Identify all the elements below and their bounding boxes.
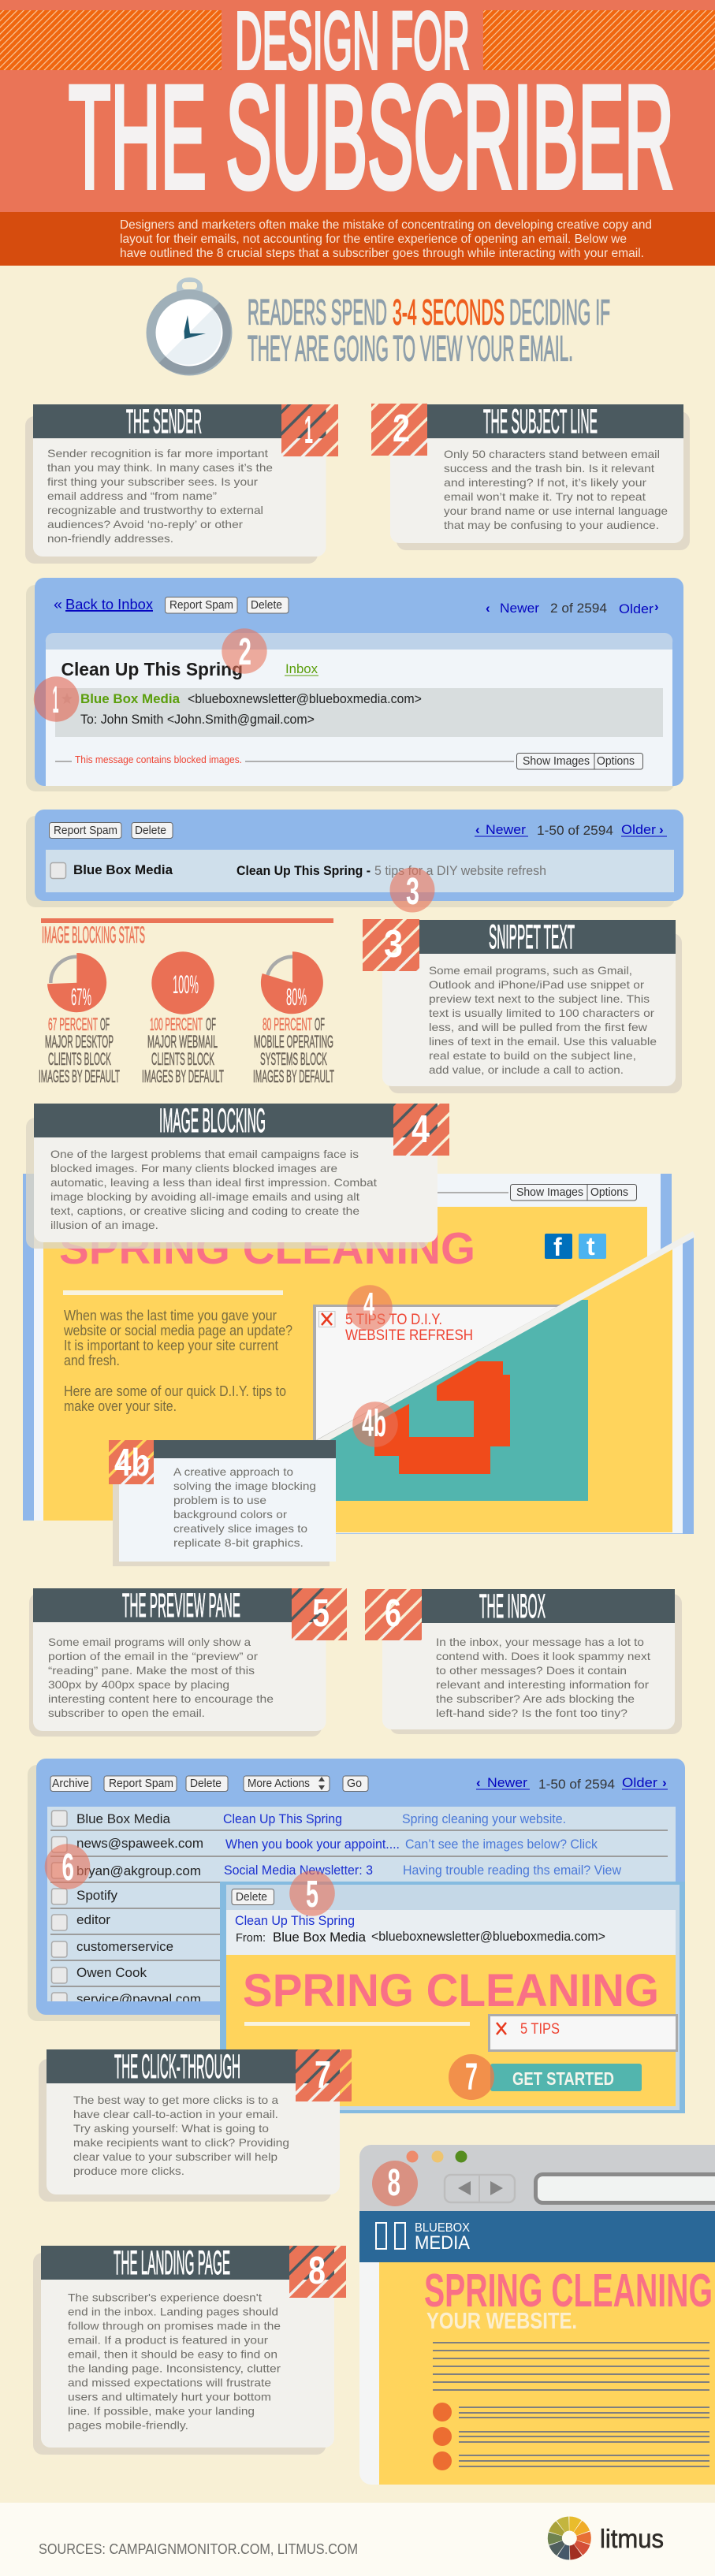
body text: clear value to your subscriber will help — [73, 2151, 277, 2163]
toolbar: Report Spam — [109, 1778, 173, 1790]
heading: readers spend 3-4 seconds: READERS SPEND — [248, 292, 387, 333]
panel: the sender — [25, 403, 338, 564]
button get started — [490, 2064, 642, 2091]
panel: the click-through — [39, 2048, 352, 2202]
text: MOBILE OPERATING — [254, 1032, 333, 1052]
message list: customerservice — [76, 1939, 173, 1954]
marker 1 — [34, 676, 79, 722]
badge 4b: 4b — [114, 1442, 150, 1484]
toolbar: Older — [619, 601, 654, 616]
caption 67 percent — [39, 1014, 120, 1086]
message list — [47, 1807, 676, 2008]
litmus logo wheel — [549, 2518, 590, 2559]
panel: blocked email mockup: Show Images — [516, 1186, 583, 1199]
pie chart 80 percent — [261, 951, 323, 1014]
message list: editor — [76, 1912, 110, 1927]
icon: twitter: t — [587, 1232, 595, 1260]
intro text block — [0, 212, 715, 266]
body text — [429, 965, 657, 1076]
marker 3: 3 — [406, 871, 419, 913]
body text: follow through on promises made in the — [68, 2321, 281, 2332]
panel: the preview pane — [29, 1587, 347, 1737]
body text: “reading” pane. Make the most of this — [48, 1665, 255, 1677]
body text: left-hand side? Is the font too tiny? — [436, 1707, 627, 1719]
header banner — [0, 0, 715, 219]
message list: Blue Box Media — [76, 1811, 171, 1826]
address bar — [536, 2174, 715, 2202]
body text — [436, 1636, 650, 1719]
message list: Can’t see the images below? Click — [405, 1837, 598, 1852]
message list: news@spaweek.com — [76, 1836, 203, 1851]
panel: preview pane mockup: From: — [236, 1931, 266, 1945]
panel: image blocking 4b callout — [109, 1440, 336, 1566]
body text: produce more clicks. — [73, 2165, 184, 2177]
body text: replicate 8-bit graphics. — [173, 1537, 304, 1549]
badge 2: 2 — [393, 408, 410, 450]
body text: One of the largest problems that email campaigns face is — [50, 1148, 359, 1160]
toolbar: Newer — [487, 1775, 527, 1790]
panel: opened email mockup: Options — [597, 755, 635, 768]
body text: less, and will be pulled from the first few — [429, 1022, 647, 1033]
panel: opened email mockup: To: John Smith <John.Smith@gmail.com> — [80, 712, 315, 727]
marker 6: 6 — [61, 1847, 74, 1889]
badge 1 — [281, 404, 338, 456]
marker 4 — [347, 1285, 393, 1331]
blocked image placeholder — [313, 1305, 561, 1440]
caption 67 percent: 67 PERCENT — [48, 1014, 98, 1034]
toolbar: « — [54, 596, 62, 612]
toolbar: Go — [347, 1778, 362, 1790]
body text: to other messages? Does it contain — [436, 1665, 627, 1677]
toolbar: Older — [622, 1775, 657, 1790]
browser nav buttons — [445, 2175, 515, 2202]
panel: inbox row mockup: 5 tips for a DIY website refresh — [374, 863, 546, 878]
marker 8 — [372, 2161, 418, 2206]
panel: the subject line — [371, 403, 690, 550]
panel: opened email mockup: Blue Box Media — [80, 691, 181, 706]
body text: portion of the email in the “preview” or — [48, 1651, 258, 1662]
badge 8: 8 — [308, 2250, 326, 2292]
panel: preview pane mockup: Clean Up This Spring — [235, 1913, 355, 1928]
icon: twitter — [579, 1232, 606, 1260]
body text — [50, 1148, 377, 1231]
intro text block: Designers and marketers often make the mistake of concentrating on developing creative copy and — [120, 218, 652, 232]
icon: stopwatch — [147, 277, 232, 375]
email copy: website or social media page an update? — [63, 1322, 292, 1338]
body text: Sender recognition is far more important — [47, 448, 268, 460]
pie chart 80 percent: 80% — [286, 983, 307, 1011]
panel: inbox row mockup: Delete — [135, 825, 166, 837]
panel: opened email mockup: This message contains blocked images. — [75, 754, 242, 765]
marker 4b: 4b — [362, 1403, 386, 1445]
panel: inbox row mockup: Report Spam — [54, 825, 117, 837]
body text: automatic, leaving a less than ideal first impression. Combat — [50, 1177, 377, 1189]
body text: email won’t make it. Try not to repeat — [444, 491, 646, 503]
body text: add value, or include a call to action. — [429, 1064, 624, 1076]
blocked image 5 tips — [489, 2015, 676, 2051]
panel: inbox row mockup: › — [659, 822, 664, 837]
caption 80 percent: SYSTEMS BLOCK — [260, 1049, 327, 1069]
panel: opened email mockup: Clean Up This Spring — [61, 659, 243, 679]
text: IMAGES BY DEFAULT — [253, 1067, 334, 1086]
body text: email address and “from name” — [47, 490, 217, 502]
panel: preview pane mockup: <blueboxnewsletter@blueboxmedia.com> — [371, 1929, 605, 1944]
badge 5: 5 — [312, 1592, 330, 1635]
body text: end in the inbox. Landing pages should — [68, 2306, 278, 2317]
panel: blocked email mockup: Options — [590, 1186, 628, 1199]
panel: preview pane mockup: Delete — [236, 1891, 267, 1904]
toolbar: › — [662, 1775, 667, 1790]
toolbar — [50, 1775, 668, 1792]
body text: have clear call-to-action in your email. — [73, 2109, 278, 2120]
panel: the preview pane: THE PREVIEW PANE — [122, 1587, 240, 1625]
message list: Clean Up This Spring — [223, 1811, 342, 1826]
panel: inbox row mockup: Newer — [486, 822, 526, 837]
body text: solving the image blocking — [173, 1480, 316, 1492]
body text — [68, 2292, 281, 2431]
marker 2: 2 — [238, 631, 251, 673]
panel: the inbox: THE INBOX — [479, 1588, 546, 1625]
panel: image blocking stats: IMAGES BY DEFAULT — [142, 1067, 224, 1086]
body text: contend with. Does it look spammy next — [436, 1651, 650, 1662]
toolbar: Delete — [251, 599, 282, 612]
footer — [0, 2503, 715, 2576]
site header — [359, 2211, 715, 2262]
marker 5 — [289, 1871, 335, 1916]
caption 67 percent: OF — [100, 1014, 110, 1034]
body text — [47, 448, 273, 545]
message list: Spotify — [76, 1888, 117, 1903]
caption 67 percent: CLIENTS BLOCK — [48, 1049, 111, 1069]
body text: audiences? Avoid ‘no-reply’ or other — [47, 519, 243, 530]
toolbar: Archive — [52, 1778, 89, 1790]
body text: blocked images. For many clients blocked images are — [50, 1163, 337, 1174]
bullet list — [433, 2403, 709, 2470]
body text: line. If possible, make your landing — [68, 2406, 255, 2417]
marker 7: 7 — [465, 2057, 478, 2098]
body text: Some email programs, such as Gmail, — [429, 965, 632, 977]
badge 4 — [393, 1104, 449, 1156]
pie chart 67 percent: 67% — [71, 983, 91, 1011]
pie chart 100 percent: 100% — [173, 970, 199, 999]
badge 3 — [363, 919, 419, 971]
toolbar: Back to Inbox — [65, 596, 154, 612]
heading: readers spend 3-4 seconds: 3-4 SECONDS — [393, 292, 505, 333]
toolbar: 2 of 2594 — [550, 601, 607, 616]
badge 8 — [289, 2246, 346, 2298]
body text: the landing page. Inconsistency, clutter — [68, 2363, 281, 2374]
marker 2 — [222, 628, 267, 674]
panel: inbox row mockup: Clean Up This Spring - — [236, 863, 371, 878]
heading: readers spend 3-4 seconds — [248, 292, 610, 369]
panel: opened email mockup: <blueboxnewsletter@blueboxmedia.com> — [188, 691, 422, 706]
caption 80 percent: OF — [315, 1014, 325, 1034]
body text — [173, 1466, 316, 1549]
panel: the landing page — [33, 2244, 346, 2455]
body text — [73, 2094, 289, 2177]
email copy — [63, 1307, 292, 1414]
body text: success and the trash bin. Is it relevant — [444, 463, 654, 475]
body text: The subscriber's experience doesn't — [68, 2292, 262, 2303]
panel: browser landing page mockup — [359, 2145, 715, 2485]
badge 3: 3 — [384, 923, 403, 966]
panel: image blocking stats: IMAGES BY DEFAULT — [39, 1067, 120, 1086]
email copy: When was the last time you gave your — [64, 1307, 277, 1323]
marker 4b — [352, 1402, 398, 1447]
body text: Only 50 characters stand between email — [444, 449, 660, 460]
panel: inbox row mockup: Blue Box Media — [73, 862, 173, 877]
badge 7 — [296, 2049, 352, 2101]
revealed layer — [315, 1231, 695, 1534]
marker 1: 1 — [52, 679, 58, 721]
body text: subscriber to open the email. — [48, 1707, 205, 1719]
intro text block: layout for their emails, not accounting for the entire experience of opening an email. Below we — [120, 233, 627, 246]
panel: image blocking stats: IMAGE BLOCKING STATS — [42, 922, 145, 948]
body text: non-friendly addresses. — [47, 533, 173, 545]
body text: users and ultimately hurt your bottom — [68, 2392, 271, 2403]
headline spring cleaning: SPRING CLEANING — [243, 1965, 659, 2016]
icon: facebook — [545, 1233, 572, 1261]
panel: browser landing page mockup: YOUR WEBSITE. — [426, 2309, 577, 2334]
badge 7: 7 — [315, 2054, 331, 2097]
badge 6: 6 — [385, 1592, 401, 1635]
email copy: make over your site. — [64, 1398, 177, 1414]
panel: image blocking: IMAGE BLOCKING — [159, 1102, 266, 1140]
panel: image blocking — [26, 1102, 449, 1249]
8-bit graphic — [374, 1361, 510, 1474]
email copy: and fresh. — [64, 1352, 120, 1368]
blocked image placeholder: 5 TIPS TO D.I.Y. — [345, 1312, 442, 1328]
panel: inbox row mockup: Older — [621, 822, 656, 837]
icon: facebook: f — [553, 1233, 562, 1261]
panel: the landing page: THE LANDING PAGE — [114, 2244, 230, 2282]
email copy: It is important to keep your site current — [64, 1337, 278, 1353]
body text: the subscriber? Are ads blocking the — [436, 1693, 635, 1705]
body text: Outlook and iPhone/iPad use snippet or — [429, 979, 644, 991]
body text: first thing your subscriber sees. Is your — [47, 476, 258, 488]
body text: The best way to get more clicks is to a — [73, 2094, 278, 2106]
panel: opened email mockup: Show Images — [523, 755, 590, 768]
panel: inbox row mockup — [26, 810, 683, 907]
caption 67 percent: MAJOR DESKTOP — [45, 1032, 114, 1052]
toolbar: 1-50 of 2594 — [538, 1777, 615, 1792]
headline spring cleaning: SPRING CLEANING — [59, 1223, 475, 1274]
blocked image 5 tips: 5 TIPS — [520, 2021, 560, 2038]
toolbar: More Actions — [248, 1778, 310, 1790]
toolbar: ‹ — [486, 601, 490, 616]
marker 6 — [45, 1844, 90, 1889]
panel: inbox row mockup: 1-50 of 2594 — [537, 823, 613, 838]
email copy: Here are some of our quick D.I.Y. tips to — [64, 1383, 286, 1399]
toolbar: ‹ — [476, 1775, 481, 1790]
panel: image blocking stats — [39, 918, 334, 1086]
body text: 300px by 400px space by placing — [48, 1679, 229, 1691]
body text: real estate to build on the subject line, — [429, 1050, 636, 1062]
sources: SOURCES: CAMPAIGNMONITOR.COM, LITMUS.COM — [39, 2541, 358, 2557]
panel: the click-through: THE CLICK-THROUGH — [114, 2048, 240, 2086]
caption 80 percent: 80 PERCENT — [263, 1014, 312, 1034]
body text: than you may think. In many cases it’s the — [47, 462, 273, 474]
panel: inbox list mockup — [28, 1759, 685, 2021]
panel: blocked email mockup — [23, 1174, 695, 1534]
caption 100 percent: MAJOR WEBMAIL — [147, 1032, 218, 1052]
body text: image blocking by avoiding all-image emails and using alt — [50, 1191, 359, 1203]
panel: the sender: THE SENDER — [126, 403, 202, 441]
body text: relevant and interesting information for — [436, 1679, 649, 1691]
message list: When you book your appoint.... — [225, 1837, 400, 1852]
body text: preview text next to the subject line. This — [429, 993, 650, 1005]
body text — [48, 1636, 274, 1719]
body text: In the inbox, your message has a lot to — [436, 1636, 644, 1648]
caption 100 percent: 100 PERCENT — [150, 1014, 203, 1034]
blocked image placeholder: WEBSITE REFRESH — [345, 1327, 473, 1344]
caption 100 percent: OF — [206, 1014, 216, 1034]
panel: inbox row mockup: ‹ — [475, 822, 480, 837]
message list: service@paypal.com — [76, 1991, 201, 2007]
badge 5 — [292, 1588, 347, 1640]
body text: Some email programs will only show a — [48, 1636, 251, 1648]
message list: Social Media Newsletter: 3 — [224, 1863, 373, 1878]
body text: make recipients want to click? Providing — [73, 2137, 289, 2149]
litmus wordmark: litmus — [600, 2524, 664, 2553]
body text: Try asking yourself: What is going to — [73, 2123, 269, 2135]
body text — [444, 449, 668, 531]
marker 5: 5 — [306, 1874, 318, 1915]
toolbar: Delete — [190, 1778, 222, 1790]
message list: Owen Cook — [76, 1965, 147, 1980]
panel: snippet text — [363, 918, 682, 1093]
panel: opened email mockup — [26, 578, 683, 791]
body text: A creative approach to — [173, 1466, 293, 1478]
caption 100 percent: CLIENTS BLOCK — [151, 1049, 214, 1069]
caption 100 percent — [142, 1014, 224, 1086]
body text: problem is to use — [173, 1495, 266, 1506]
body text: background colors or — [173, 1509, 287, 1521]
marker 8: 8 — [388, 2162, 400, 2204]
site header: MEDIA — [415, 2232, 471, 2254]
body text: recognizable and trustworthy to external — [47, 504, 263, 516]
body text: creatively slice images to — [173, 1523, 307, 1535]
placeholder copy lines — [433, 2342, 709, 2391]
panel: preview pane mockup: Blue Box Media — [273, 1930, 367, 1945]
message — [46, 633, 672, 650]
badge 6 — [365, 1589, 422, 1640]
body text: interesting content here to encourage the — [48, 1693, 274, 1705]
body text: email, then it should be easy to find on — [68, 2349, 277, 2360]
message list: Spring cleaning your website. — [402, 1811, 566, 1826]
badge 1: 1 — [304, 409, 313, 452]
body text: that may be confusing to your audience. — [444, 519, 659, 531]
badge 4: 4 — [411, 1108, 430, 1151]
badge 2 — [371, 404, 427, 456]
body text: your brand name or use internal language — [444, 505, 668, 517]
marker 7 — [449, 2054, 494, 2100]
panel: preview pane mockup — [220, 1882, 685, 2113]
body text: text is usually limited to 100 characters or — [429, 1007, 654, 1019]
message list: bryan@akgroup.com — [76, 1863, 201, 1878]
pie chart 100 percent — [151, 951, 214, 1014]
toolbar: › — [654, 599, 659, 614]
body text: text, captions, or creative slicing and coding to create the — [50, 1205, 359, 1217]
marker 4: 4 — [363, 1286, 374, 1322]
body text: lines of text in the email. Use this valuable — [429, 1036, 657, 1048]
button get started: GET STARTED — [512, 2068, 614, 2089]
body text: email. If a product is featured in your — [68, 2335, 268, 2346]
caption 80 percent — [253, 1014, 334, 1086]
message list: Having trouble reading ths email? View — [403, 1863, 622, 1878]
toolbar: Newer — [500, 601, 539, 616]
panel: opened email mockup: Inbox — [285, 661, 318, 676]
site header: BLUEBOX — [415, 2221, 470, 2235]
body text: and interesting? If not, it’s likely your — [444, 477, 646, 489]
body text: and missed expectations will frustrate — [68, 2377, 271, 2388]
toolbar: Report Spam — [169, 599, 233, 612]
body text: illusion of an image. — [50, 1219, 158, 1231]
body text: pages mobile-friendly. — [68, 2420, 188, 2431]
pie chart 67 percent — [47, 953, 106, 1012]
marker 3 — [389, 867, 435, 913]
intro text block: have outlined the 8 crucial steps that a subscriber goes through while interacting with your email. — [120, 247, 644, 260]
toolbar — [54, 596, 659, 616]
panel: the inbox — [365, 1588, 682, 1734]
